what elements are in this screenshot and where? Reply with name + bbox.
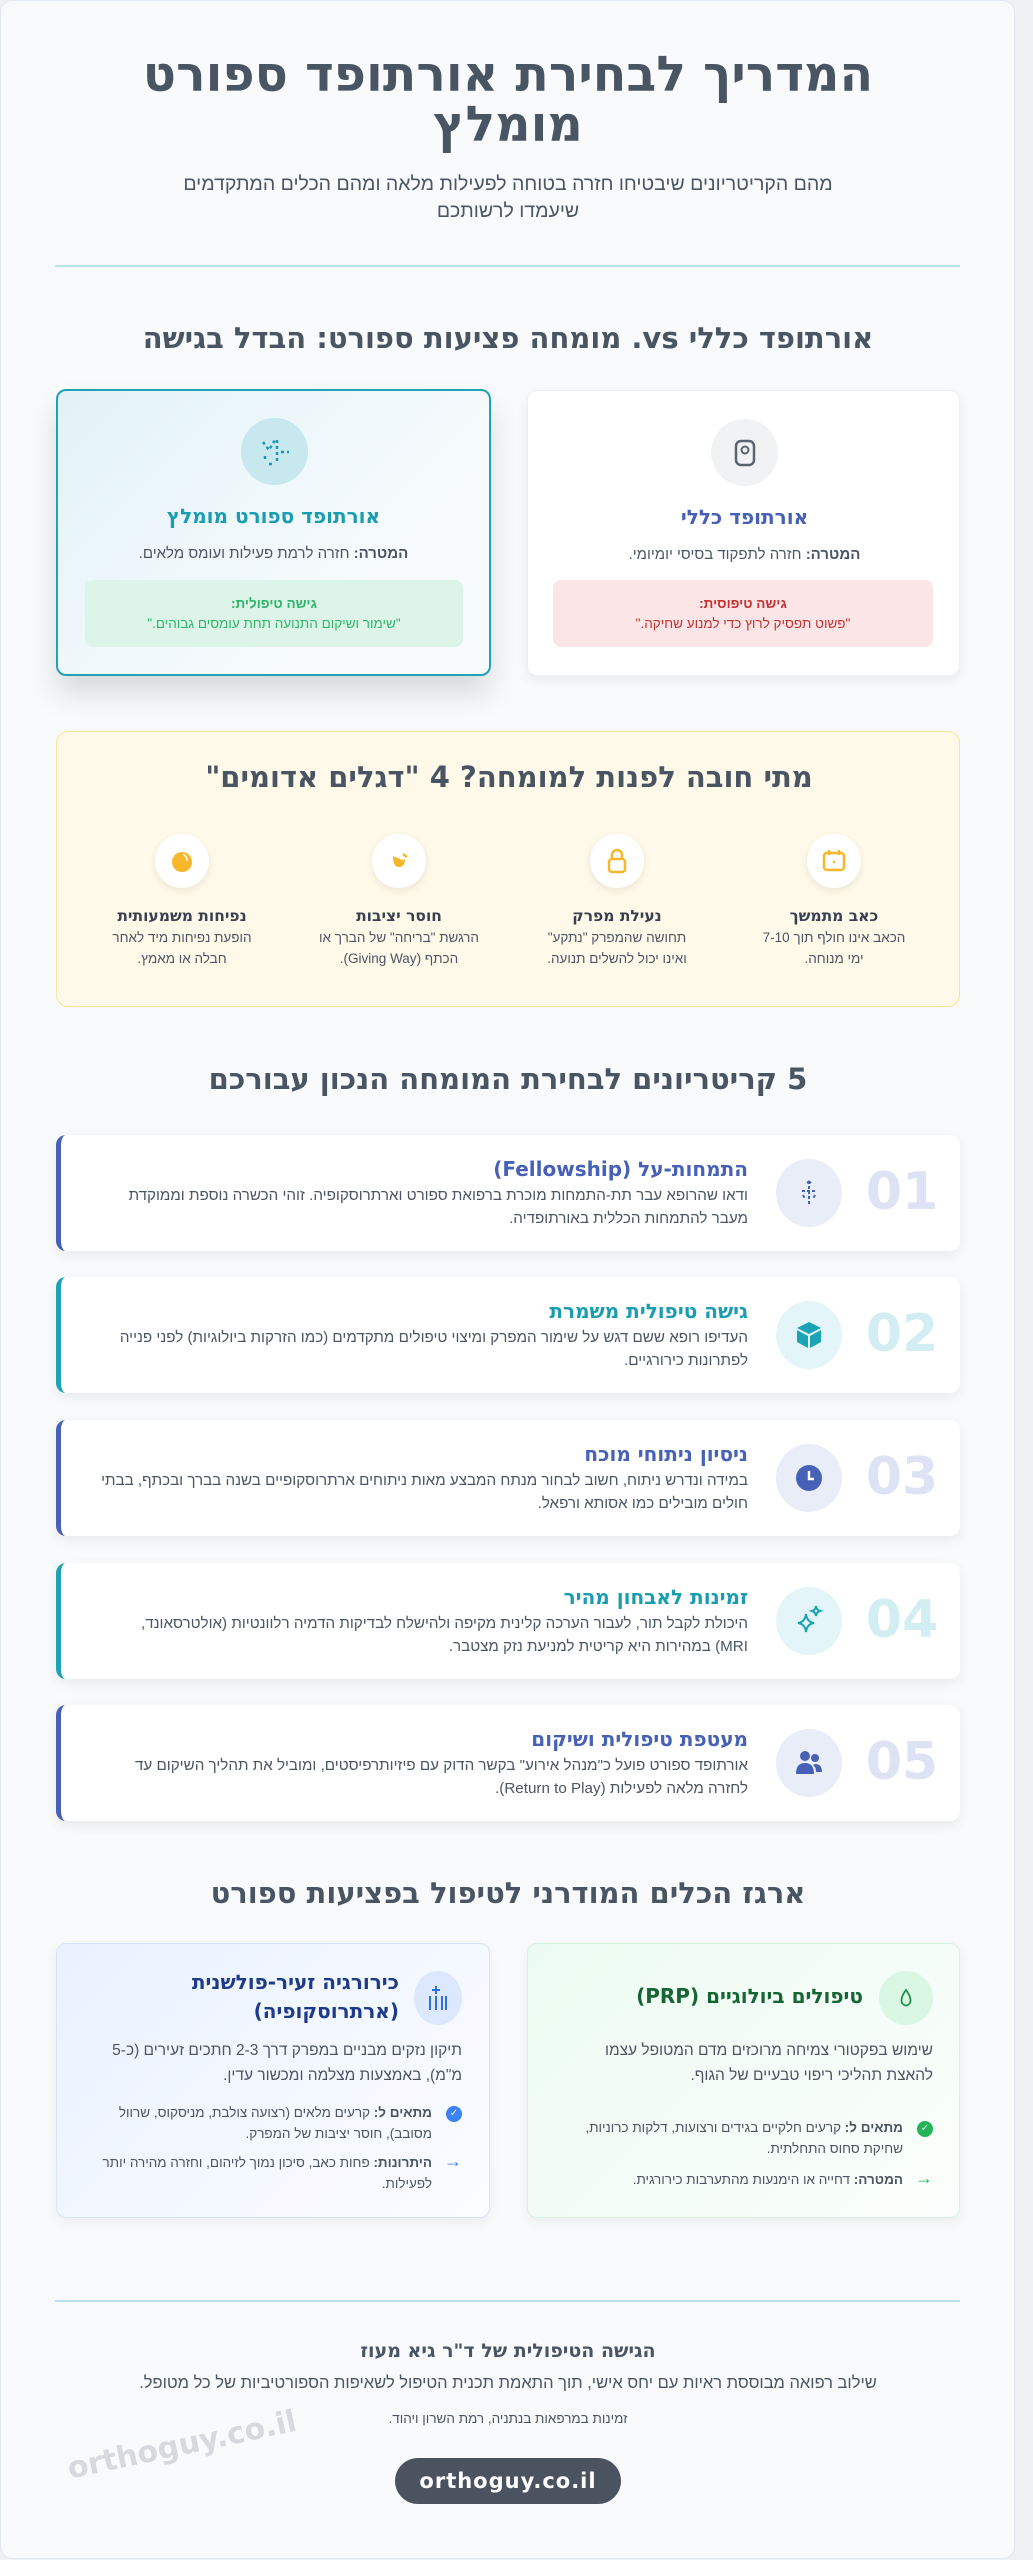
criterion 04: MRI) במהירות היא קריטית למניעת נזק מצטבר. — [449, 1638, 748, 1655]
title: טיפולים ביולוגיים (PRP) — [636, 1984, 863, 2008]
icon: instruments — [414, 1971, 462, 2025]
criterion 01: מעבר להתמחות הכללית באורתופדיה. — [509, 1210, 748, 1227]
footer availability: זמינות במרפאות בנתניה, רמת השרון ויהוד. — [389, 2411, 627, 2426]
icon: swelling — [155, 834, 209, 888]
icon: fellowship — [776, 1159, 842, 1227]
icon: team — [776, 1729, 842, 1797]
icon: clock — [776, 1444, 842, 1512]
icon: cube — [776, 1301, 842, 1369]
flag: swelling — [112, 834, 252, 966]
footer text: שילוב רפואה מבוססת ראיות עם יחס אישי, תוך התאמת תכנית הטיפול לשאיפות הספורטיביות של כל מטופל. — [139, 2374, 877, 2392]
icon: general — [711, 419, 778, 486]
icon: calendar — [807, 834, 861, 888]
criterion 05: לחזרה מלאה לפעילות (Return to Play). — [495, 1780, 748, 1797]
description: שימוש בפקטורי צמיחה מרוכזים מדם המטופל עצמו — [605, 2042, 933, 2059]
criterion 03: ניסיון ניתוחי מוכח — [584, 1442, 748, 1466]
criterion 02 — [56, 1277, 960, 1393]
description — [605, 2042, 933, 2084]
panel: PRP — [527, 1943, 960, 2218]
bullet: suitable: ✓ — [450, 2108, 458, 2119]
subtitle — [183, 173, 833, 222]
card title: אורתופד כללי — [681, 505, 808, 529]
criterion 05: 05 — [866, 1732, 938, 1792]
approach box: "שימור ושיקום התנועה תחת עומסים גבוהים." — [147, 616, 401, 631]
flag: persistent pain: הכאב אינו חולף תוך 7-10 — [763, 930, 905, 945]
flag: swelling: נפיחות משמעותית — [117, 907, 247, 925]
criterion 03 — [56, 1420, 960, 1536]
card title: אורתופד ספורט מומלץ — [167, 504, 380, 528]
criterion 02: לפתרונות כירורגיים. — [624, 1352, 748, 1369]
approach box — [553, 580, 933, 647]
criterion 01: התמחות-על (Fellowship) — [493, 1157, 748, 1181]
icon: instability — [372, 834, 426, 888]
approach box: גישה טיפוסית: — [699, 596, 787, 611]
panel: general orthopedist — [527, 390, 960, 676]
heading: comparison: אורתופד כללי vs. מומחה פציעות ספורט: הבדל בגישה — [143, 321, 873, 355]
bullet: suitable — [585, 2120, 933, 2156]
flag: persistent pain — [763, 834, 905, 966]
subtitle: מהם הקריטריונים שיבטיחו חזרה בטוחה לפעילות מלאה ומהם הכלים המתקדמים — [183, 173, 833, 195]
flag: instability: הכתף (Giving Way). — [340, 951, 458, 966]
flag: persistent pain: ימי מנוחה. — [804, 951, 864, 966]
criterion 04: 04 — [866, 1590, 938, 1650]
bullet: suitable: מתאים ל: קרעים מלאים (רצועה צולבת, מניסקוס, שרוול — [119, 2105, 432, 2120]
bullet: suitable: מסובב), חוסר יציבות של המפרק. — [246, 2126, 432, 2141]
title: כירורגיה זעיר-פולשנית (ארתרוסקופיה) — [192, 1970, 399, 2023]
description — [112, 2042, 462, 2084]
criterion 01: 01 — [866, 1162, 938, 1222]
goal: המטרה: חזרה לרמת פעילות ועומס מלאים. — [139, 545, 408, 562]
description: להאצת תהליכי ריפוי טבעיים של הגוף. — [690, 2067, 933, 2084]
bullet: goal — [633, 2168, 933, 2188]
flag: joint lock: נעילת מפרק — [572, 907, 662, 925]
icon: lock — [590, 834, 644, 888]
criterion 04: היכולת לקבל תור, לעבור הערכה קלינית מקיפה ולהישלח לבדיקות הדמיה רלוונטיות (אולטרסאונד, — [141, 1615, 748, 1632]
criterion 03: 03 — [866, 1447, 938, 1507]
criterion 05 — [56, 1705, 960, 1821]
flag: joint lock — [547, 834, 687, 966]
bullet: advantages: היתרונות: פחות כאב, סיכון נמוך לזיהום, וחזרה מהירה יותר — [103, 2155, 432, 2170]
flag: instability: הרגשת "בריחה" של הברך או — [319, 930, 479, 945]
flag: instability: חוסר יציבות — [356, 907, 442, 925]
footer heading: הגישה הטיפולית של ד"ר גיא מעוז — [360, 2340, 656, 2362]
flag: joint lock: תחושה שהמפרק "נתקע" — [548, 930, 686, 945]
icon: drop — [879, 1971, 933, 2025]
criterion 02: העדיפו רופא ששם דגש על שימור המפרק ומיצוי טיפולים מתקדמים (כמו הזרקות ביולוגיות) לפני פנייה — [120, 1329, 748, 1346]
panel: sports orthopedist — [56, 389, 491, 676]
heading: toolbox: ארגז הכלים המודרני לטיפול בפציעות ספורט — [211, 1876, 805, 1910]
goal: המטרה: חזרה לתפקוד בסיסי יומיומי. — [629, 546, 860, 563]
button: website — [395, 2458, 621, 2504]
criterion 03: במידה ונדרש ניתוח, חשוב לבחור מנתח המבצע מאות ניתוחים ארתרוסקופיים בשנה בברך ובכתף, בבתי — [101, 1472, 748, 1489]
bullet: advantages: לפעילות. — [382, 2176, 432, 2191]
criterion 01: ודאו שהרופא עבר תת-התמחות מוכרת ברפואת ספורט וארתרוסקופיה. זוהי הכשרה נוספת וממוקדת — [129, 1187, 748, 1204]
description: תיקון נזקים מבניים במפרק דרך 2-3 חתכים זעירים (כ-5 — [112, 2042, 462, 2059]
description: מ"מ), באמצעות מצלמה ומכשור עדין. — [223, 2067, 462, 2084]
criterion 05: מעטפת טיפולית ושיקום — [531, 1727, 748, 1751]
panel: red flags — [56, 731, 960, 1007]
flag: swelling: הופעת נפיחות מיד לאחר — [112, 930, 252, 945]
approach box — [85, 580, 463, 647]
criterion 05: אורתופד ספורט פועל כ"מנהל אירוע" בקשר הדוק עם פיזיותרפיסטים, ומוביל את תהליך השיקום עד — [135, 1757, 748, 1774]
flag: instability — [319, 834, 479, 966]
title: המדריך לבחירת אורתופד ספורט מומלץ — [143, 46, 873, 153]
criterion 04 — [56, 1563, 960, 1679]
flag: swelling: חבלה או מאמץ. — [137, 951, 227, 966]
approach box: גישה טיפולית: — [231, 596, 317, 611]
icon: sparkle — [776, 1587, 842, 1655]
bullet: advantages: → — [444, 2151, 462, 2171]
icon: sports — [241, 418, 308, 485]
criterion 02: 02 — [866, 1304, 938, 1364]
heading: 5 criteria: 5 קריטריונים לבחירת המומחה הנכון עבורכם — [209, 1062, 807, 1096]
button: website: orthoguy.co.il — [419, 2469, 597, 2493]
criterion 01 — [56, 1135, 960, 1251]
flag: joint lock: ואינו יכול להשלים תנועה. — [547, 951, 687, 966]
bullet: suitable: מתאים ל: קרעים חלקיים בגידים ורצועות, דלקות כרוניות, — [585, 2120, 903, 2135]
bullet: suitable: ✓ — [921, 2123, 929, 2134]
bullet: suitable — [119, 2105, 462, 2141]
watermark: orthoguy.co.il — [64, 2404, 300, 2487]
flag: persistent pain: כאב מתמשך — [790, 907, 878, 925]
bullet: suitable: שחיקת סחוס התחלתית. — [767, 2141, 903, 2156]
bullet: advantages — [102, 2151, 462, 2191]
criterion 04: זמינות לאבחון מהיר — [564, 1585, 748, 1609]
criterion 03: חולים מובילים כמו אסותא ורפאל. — [538, 1495, 748, 1512]
bullet: goal: → — [915, 2168, 933, 2188]
criterion 02: גישה טיפולית משמרת — [549, 1299, 748, 1323]
subtitle: שיעמדו לרשותכם — [437, 200, 579, 222]
heading: red flags: מתי חובה לפנות למומחה? 4 "דגלים אדומים" — [205, 760, 813, 794]
panel: arthroscopy — [56, 1943, 490, 2218]
approach box: "פשוט תפסיק לרוץ כדי למנוע שחיקה." — [636, 616, 850, 631]
bullet: goal: המטרה: דחייה או הימנעות מהתערבות כירורגית. — [633, 2172, 903, 2187]
